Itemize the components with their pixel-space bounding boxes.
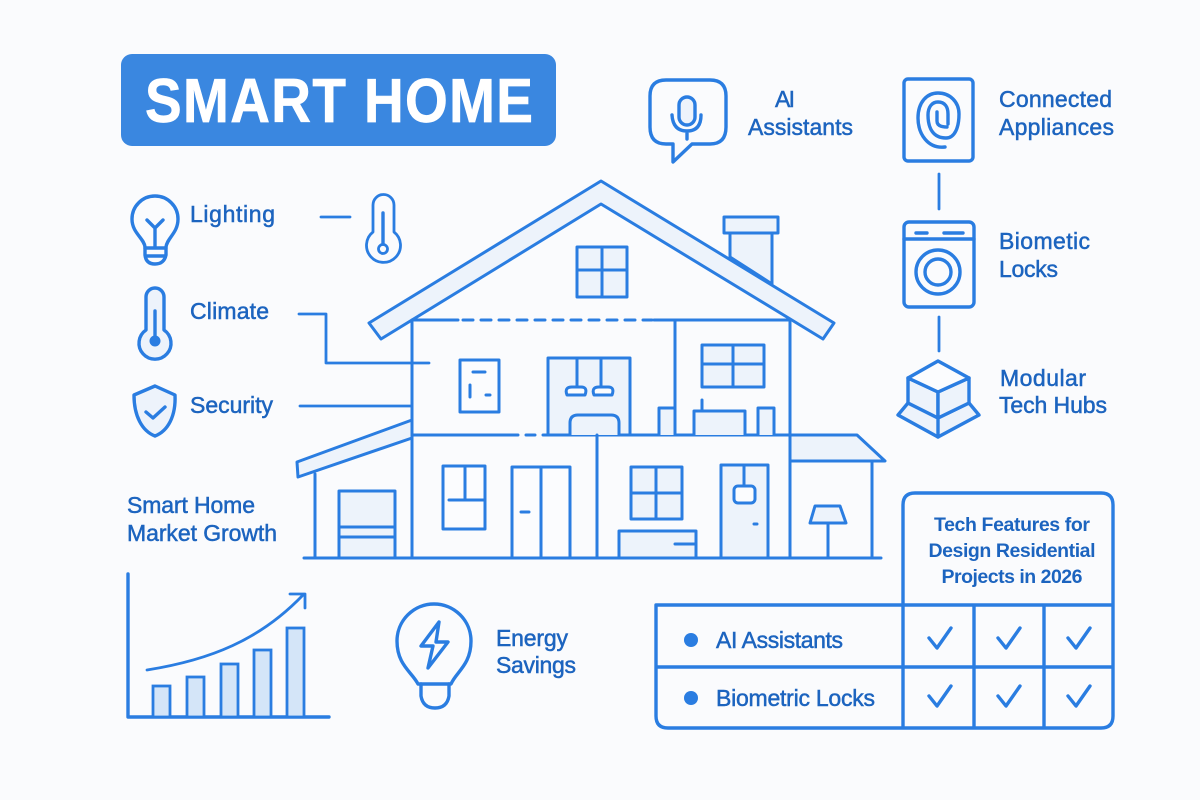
icon: energy savings bulb bbox=[397, 604, 471, 708]
table title bbox=[928, 514, 1096, 588]
icon: climate thermometer bbox=[139, 288, 171, 359]
upper furniture bbox=[659, 400, 774, 435]
row: Biometric Locks bbox=[684, 685, 1090, 711]
label: Connected Appliances: Appliances bbox=[999, 114, 1114, 140]
label: Modular Tech Hubs: Modular bbox=[1000, 365, 1086, 391]
right upper window bbox=[702, 345, 764, 387]
porch roof bbox=[790, 435, 885, 461]
icon: lighting bulb bbox=[132, 196, 178, 264]
garage door bbox=[339, 491, 395, 558]
connector: washer to cube bbox=[938, 317, 940, 351]
chimney bbox=[724, 217, 778, 284]
label: Biometic Locks: Locks bbox=[999, 256, 1058, 282]
wall panel bbox=[460, 360, 499, 412]
lean-to roof bbox=[297, 420, 412, 477]
table title: Projects in 2026 bbox=[942, 566, 1083, 588]
double door bbox=[512, 467, 570, 558]
house illustration bbox=[297, 181, 885, 558]
connector: lighting bbox=[321, 216, 350, 218]
floor lamp bbox=[810, 506, 846, 558]
mid floor line bbox=[412, 434, 790, 436]
label: Energy Savings: Energy bbox=[496, 625, 568, 651]
heading: market growth: Smart Home bbox=[127, 492, 255, 518]
label: Biometic Locks: Biometic bbox=[999, 228, 1090, 254]
title banner bbox=[121, 54, 556, 146]
label: Energy Savings: Savings bbox=[496, 652, 576, 678]
label: Energy Savings bbox=[496, 625, 576, 678]
label: Biometic Locks bbox=[999, 228, 1090, 282]
bar chart: market growth bbox=[128, 574, 329, 717]
icon: security shield bbox=[134, 386, 175, 436]
row: AI Assistants: AI Assistants bbox=[716, 627, 843, 653]
table: tech features bbox=[656, 493, 1113, 728]
label: Lighting: Lighting bbox=[190, 201, 275, 227]
label: Climate: Climate bbox=[190, 298, 269, 324]
lower walls bbox=[315, 435, 872, 558]
connector: security bbox=[300, 405, 412, 407]
icon: washing machine bbox=[904, 222, 974, 307]
attic floor dashes bbox=[463, 318, 652, 322]
table title: Design Residential bbox=[928, 540, 1096, 562]
front door bbox=[721, 465, 768, 558]
label: Connected Appliances: Connected bbox=[999, 86, 1112, 112]
icon: modular cube bbox=[898, 361, 979, 437]
table title: Tech Features for bbox=[934, 514, 1090, 536]
row: AI Assistants bbox=[684, 627, 1090, 653]
label: Modular Tech Hubs bbox=[999, 365, 1107, 418]
label: Modular Tech Hubs: Tech Hubs bbox=[999, 392, 1107, 418]
ground line bbox=[304, 556, 881, 560]
cabinet bbox=[619, 531, 696, 558]
lower left window bbox=[443, 466, 485, 529]
roof bbox=[369, 181, 834, 339]
icon: AI assistant speech bubble bbox=[650, 80, 726, 162]
lower centre window bbox=[631, 467, 682, 519]
icon: fingerprint box bbox=[904, 79, 973, 161]
title banner: SMART HOME bbox=[145, 67, 533, 136]
upper walls bbox=[412, 320, 790, 558]
label: AI Assistants bbox=[748, 86, 853, 140]
heading: market growth: Market Growth bbox=[127, 520, 277, 546]
label: Connected Appliances bbox=[999, 86, 1114, 140]
connector: climate bbox=[299, 314, 429, 363]
label: AI Assistants: AI bbox=[775, 86, 795, 112]
icon: thermometer near house bbox=[366, 194, 400, 262]
bedroom alcove bbox=[548, 358, 630, 435]
attic window bbox=[577, 247, 627, 297]
row: Biometric Locks: Biometric Locks bbox=[716, 685, 875, 711]
heading: market growth bbox=[127, 492, 277, 546]
label: AI Assistants: Assistants bbox=[748, 114, 853, 140]
table grid bbox=[656, 493, 1113, 728]
label: Security: Security bbox=[190, 392, 274, 418]
connector: fingerprint to washer bbox=[938, 174, 940, 209]
